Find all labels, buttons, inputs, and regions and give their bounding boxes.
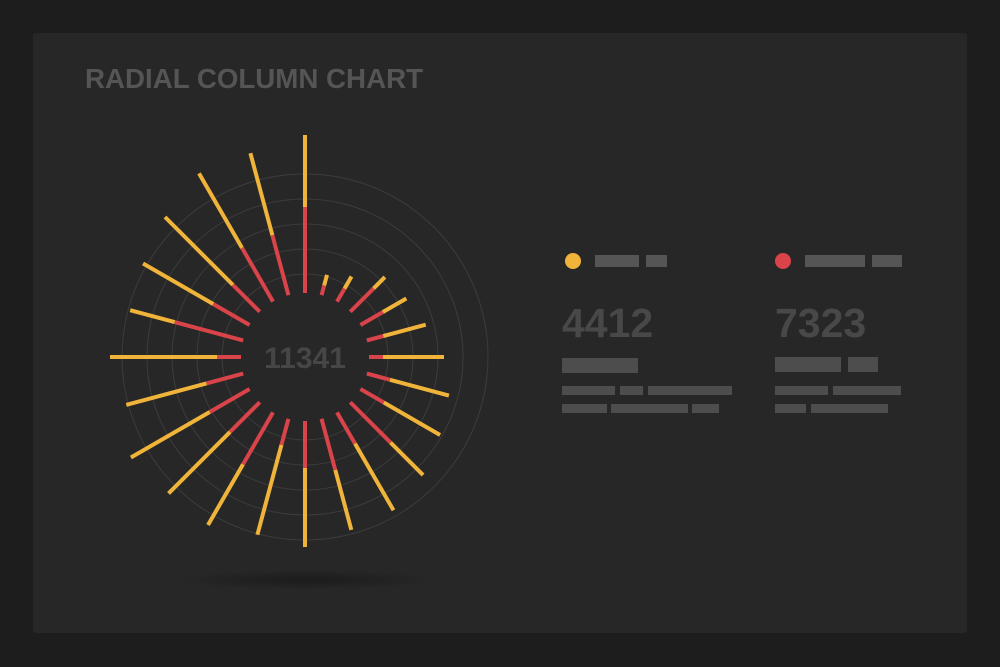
chart shadow (175, 570, 435, 590)
title: RADIAL COLUMN CHART (85, 63, 423, 94)
radial column chart (110, 135, 488, 547)
value: 4412: 4412 (562, 300, 653, 346)
legend: red series (775, 253, 902, 413)
center total: 11341 (264, 342, 346, 375)
value: 7323: 7323 (775, 300, 866, 346)
legend: yellow series (562, 253, 732, 413)
